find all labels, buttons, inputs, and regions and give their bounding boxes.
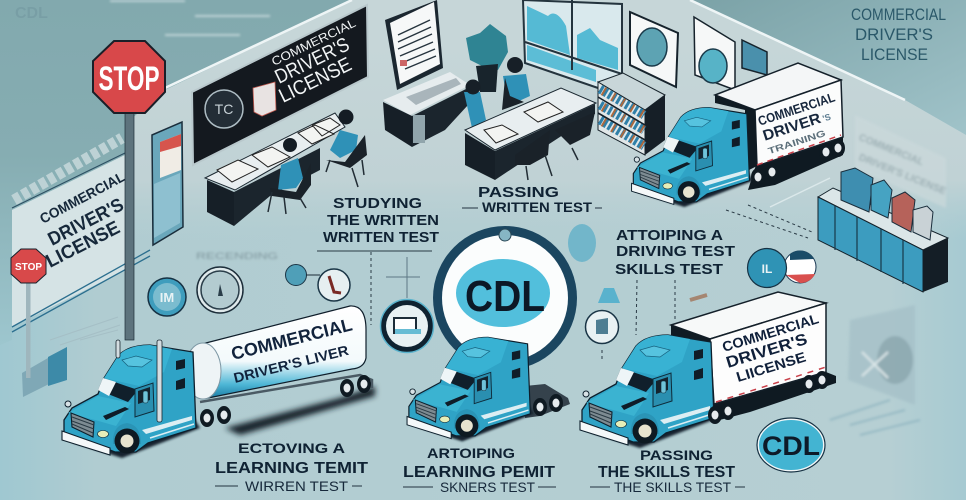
step label: studying: WRITTEN TEST	[323, 229, 439, 246]
panel: chalkboard: LICENSE	[276, 54, 355, 107]
panel: chalkboard: COMMERCIAL	[269, 16, 358, 69]
heading: top right title: COMMERCIAL	[851, 5, 946, 24]
icons row left	[148, 257, 434, 352]
person seated at wall	[502, 57, 530, 110]
right wall panel faded	[855, 115, 948, 208]
heading: top right title	[851, 5, 946, 64]
door	[152, 122, 183, 245]
faint caption: RECENDING	[196, 251, 278, 261]
panel: study desk with students	[205, 110, 367, 226]
student one	[268, 138, 311, 214]
icon: badge: IM	[160, 290, 174, 305]
step label: learning permit left: LEARNING TEMIT	[215, 460, 368, 477]
trailer lettering: 'S	[821, 112, 832, 124]
connector rule under label	[317, 250, 432, 252]
step label: learning permit left: WIRREN TEST	[245, 478, 348, 494]
fence sign text: LICENSE	[43, 217, 124, 272]
truck: centre flatbed	[407, 337, 570, 441]
right wall panel faded: COMMERCIAL	[857, 132, 925, 168]
step label: driving test: SKILLS TEST	[615, 261, 723, 278]
icon: CDL badge	[757, 418, 825, 472]
step label: passing skills	[590, 447, 745, 495]
sky streaks	[110, 1, 270, 35]
step label: studying	[323, 195, 439, 246]
tanker lettering: DRIVER'S LIVER	[232, 342, 350, 386]
panel: chalkboard: DRIVER'S	[272, 34, 353, 88]
sky left	[0, 0, 352, 345]
faint logo in sky: CDL	[15, 5, 48, 22]
step label: learning permit left	[215, 440, 368, 494]
step label: learning permit left: ECTOVING A	[238, 440, 345, 456]
connector dashes	[371, 252, 675, 362]
trailer lettering: DRIVER	[761, 110, 823, 145]
floor glint	[770, 178, 830, 207]
fence sign text: COMMERCIAL	[37, 168, 128, 227]
panel: second desk with students	[464, 57, 596, 180]
panel: fence with sign	[12, 138, 150, 397]
icon: small dial	[286, 264, 350, 301]
step label: driving test: DRIVING TEST	[616, 243, 735, 260]
step label: driving test	[615, 227, 735, 278]
chairs	[515, 112, 595, 165]
step label: learning permit centre: SKNERS TEST	[440, 479, 535, 495]
step label: learning permit centre: LEARNING PEMIT	[403, 464, 555, 481]
heading: top right title: DRIVER'S	[855, 25, 933, 44]
plant	[466, 24, 508, 92]
cabinet with equipment	[818, 168, 948, 292]
truck: top right box truck	[632, 63, 846, 207]
person center	[464, 80, 486, 128]
window	[523, 0, 622, 88]
dashed guide lines right	[726, 205, 812, 238]
icon: small stop sign	[11, 249, 46, 283]
books on desk	[217, 118, 340, 182]
trailer lettering: LIICENSE	[734, 349, 808, 385]
fence sign text: DRIVER'S	[45, 195, 127, 250]
central logo	[433, 226, 577, 370]
icon: small stop sign: STOP	[15, 262, 42, 273]
icon: badge	[148, 278, 186, 316]
icon: large stop sign	[93, 41, 165, 340]
step label: learning permit centre: ARTOIPING	[427, 445, 515, 461]
icon: large stop sign: STOP	[98, 60, 160, 98]
panel: monitor and desk	[383, 0, 470, 147]
wall top edge highlights	[165, 0, 905, 100]
trailer lettering: DRIVER'S	[724, 331, 810, 372]
wall	[130, 0, 966, 240]
tanker lettering	[229, 314, 354, 386]
icon: small pictograms right of logo	[568, 224, 707, 344]
icon: gauge	[197, 267, 243, 313]
trailer lettering: COMMERCIAL	[756, 90, 837, 129]
sky right	[690, 0, 966, 135]
tanker lettering: COMMERCIAL	[229, 314, 354, 364]
truck: bottom right box truck	[580, 292, 836, 448]
trailer lettering: COMMERCIAL	[720, 310, 821, 355]
step label: passing written	[462, 184, 602, 215]
trailer lettering: TRAINING	[767, 128, 827, 156]
icon: CDL badge: CDL	[762, 431, 820, 461]
faded sketch panel with X	[830, 305, 920, 435]
step label: studying: THE WRITTEN	[327, 212, 439, 229]
icon: marker	[386, 257, 420, 298]
step label: passing skills: THE SKILLS TEST	[598, 464, 735, 481]
icon: flag badge: IL	[762, 262, 772, 276]
central logo: CDL	[465, 272, 545, 321]
posters	[630, 12, 767, 90]
step label: driving test: ATTOIPING A	[616, 227, 723, 244]
step label: passing written: WRITTEN TEST	[482, 199, 592, 215]
panel: chalkboard	[192, 5, 368, 165]
bookshelf	[598, 73, 665, 155]
right wall panel faded: DRIVER'S LICENSE	[857, 152, 948, 197]
fence sign text	[37, 168, 128, 272]
step label: passing skills: PASSING	[640, 447, 713, 463]
truck: tanker	[62, 306, 375, 458]
step label: passing written: PASSING	[478, 184, 559, 201]
icon: document circle	[380, 300, 434, 352]
student two	[326, 110, 367, 187]
trailer lettering	[756, 90, 846, 156]
step label: studying: STUDYING	[333, 195, 422, 212]
panel: chalkboard: TC	[215, 101, 233, 117]
heading: top right title: LICENSE	[861, 45, 928, 64]
step label: learning permit centre	[403, 445, 556, 495]
trailer lettering	[720, 310, 821, 385]
icon: flag badge	[748, 248, 816, 288]
step label: passing skills: THE SKILLS TEST	[614, 479, 731, 495]
